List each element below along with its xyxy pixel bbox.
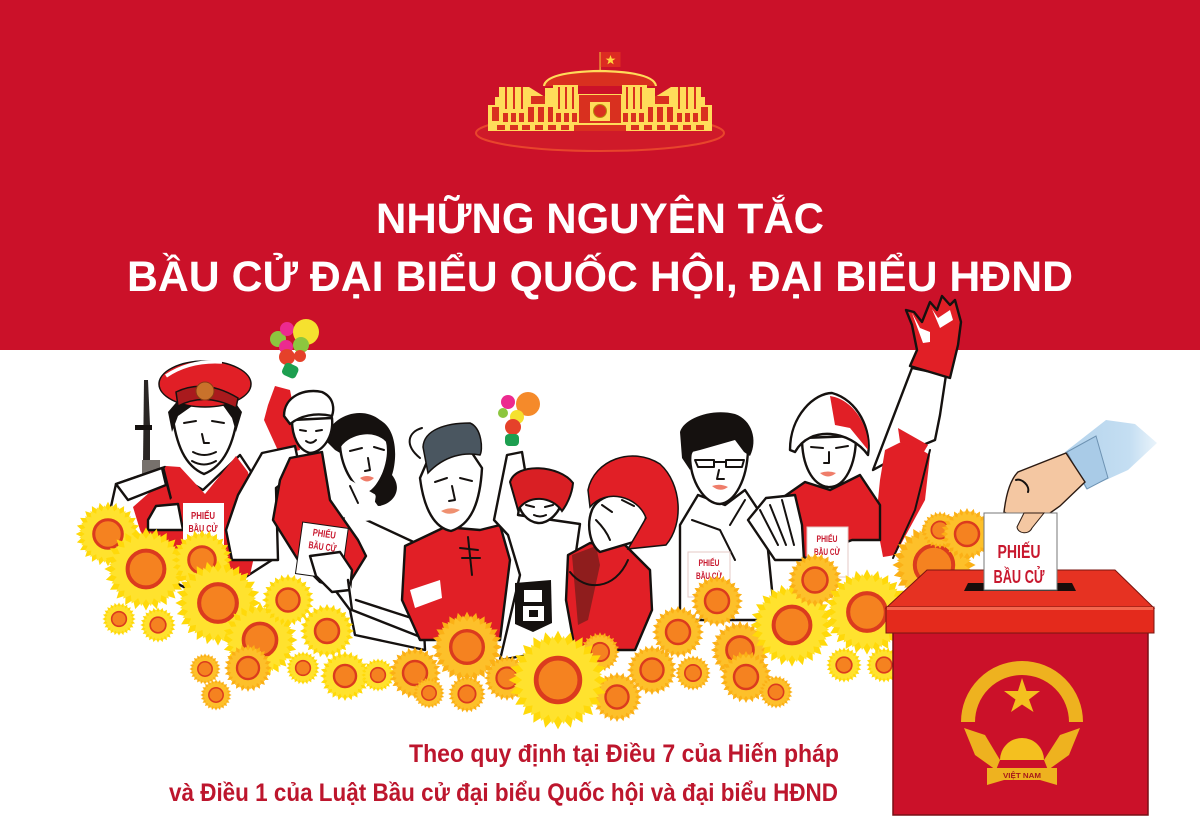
- ballot: BẦU CỬ: [814, 546, 840, 558]
- dress: [494, 452, 585, 660]
- title: NHỮNG NGUYÊN TẮC: [376, 194, 824, 243]
- mother's body: [320, 517, 425, 650]
- red shirt: [402, 525, 510, 640]
- national emblem: [964, 668, 1080, 785]
- mother's neck: [344, 480, 376, 524]
- ballot: [688, 552, 730, 597]
- ballot: PHIẾU: [312, 526, 337, 542]
- hand on shoulder: [748, 495, 804, 560]
- icon: National Assembly building: [476, 52, 724, 151]
- mother's hand: [310, 552, 352, 592]
- apron: [515, 580, 552, 632]
- figure: ethnic child with flowers: [494, 392, 585, 660]
- face lines: [184, 421, 224, 464]
- ground ellipse: [476, 115, 724, 151]
- face: [589, 494, 648, 552]
- face: [690, 430, 748, 504]
- slot: [964, 583, 1076, 591]
- legal basis text: Theo quy định tại Điều 7 của Hiến pháp: [409, 740, 839, 768]
- white lower background: [0, 350, 1200, 825]
- bouquet: [498, 392, 540, 446]
- ballot: PHIẾU: [698, 558, 720, 569]
- lid front: [886, 607, 1154, 633]
- facade red windows: [492, 87, 708, 131]
- hand: [1004, 420, 1157, 520]
- flag: [600, 52, 620, 71]
- red shirt: [133, 456, 260, 580]
- ballot: [807, 527, 848, 577]
- shirt: [680, 490, 775, 620]
- ballot: BẦU CỬ: [308, 538, 338, 555]
- box body: [893, 630, 1148, 815]
- body: [108, 455, 272, 600]
- hair: [168, 398, 242, 432]
- child's red arm: [264, 386, 300, 455]
- legal basis text: và Điều 1 của Luật Bầu cử đại biểu Quốc hội và đại biểu HĐND: [169, 779, 838, 807]
- figure: worker raising hand: [748, 296, 961, 577]
- ballot: PHIẾU: [816, 534, 838, 545]
- figure: man with glasses: [680, 412, 775, 620]
- child's cap: [284, 391, 333, 424]
- red torso: [770, 475, 880, 560]
- child's face: [292, 418, 332, 453]
- ballot: [183, 503, 224, 545]
- cap: [159, 361, 251, 408]
- ballot box: [886, 420, 1157, 815]
- paper ballot: BẦU CỬ: [994, 566, 1045, 587]
- figure: central young man: [402, 423, 510, 640]
- title: [127, 194, 1073, 301]
- dome: [544, 71, 656, 86]
- building body: [488, 85, 712, 131]
- ballot: BẦU CỬ: [188, 522, 218, 535]
- flowers bouquet: [270, 319, 319, 380]
- red header band: [0, 0, 1200, 350]
- mother's face: [340, 433, 388, 493]
- face: [802, 436, 856, 487]
- figure: mother and child: [226, 319, 430, 650]
- paper ballot: PHIẾU: [998, 541, 1040, 562]
- rifle: [135, 380, 160, 474]
- ballot: BẦU CỬ: [696, 570, 722, 582]
- ballot: [295, 522, 348, 580]
- child's red body: [273, 452, 366, 590]
- paper ballot: [984, 513, 1057, 590]
- title: BẦU CỬ ĐẠI BIỂU QUỐC HỘI, ĐẠI BIỂU HĐND: [127, 252, 1073, 301]
- mother's arm: [226, 446, 300, 560]
- figure: ethnic woman with red hat: [566, 456, 678, 650]
- small emblem on facade: [590, 102, 610, 121]
- legal basis text: [169, 740, 839, 807]
- raised arm: [873, 368, 946, 470]
- shoulder strap: [116, 468, 166, 500]
- ballot: PHIẾU: [191, 509, 215, 522]
- grey cap: [423, 423, 481, 473]
- body: [566, 543, 652, 650]
- red hat: [588, 456, 678, 549]
- sunflowers: [75, 501, 993, 730]
- glove: [906, 296, 961, 378]
- figure: soldier with rifle: [108, 361, 272, 600]
- hat and face: [518, 497, 562, 523]
- neck and face: [172, 395, 238, 474]
- helmet: [790, 393, 869, 455]
- mother's hair: [325, 413, 397, 506]
- neck and face: [420, 450, 482, 531]
- hand: [148, 504, 183, 530]
- red sleeve: [876, 440, 930, 557]
- national emblem: VIỆT NAM: [1003, 771, 1041, 780]
- lid top: [886, 570, 1154, 608]
